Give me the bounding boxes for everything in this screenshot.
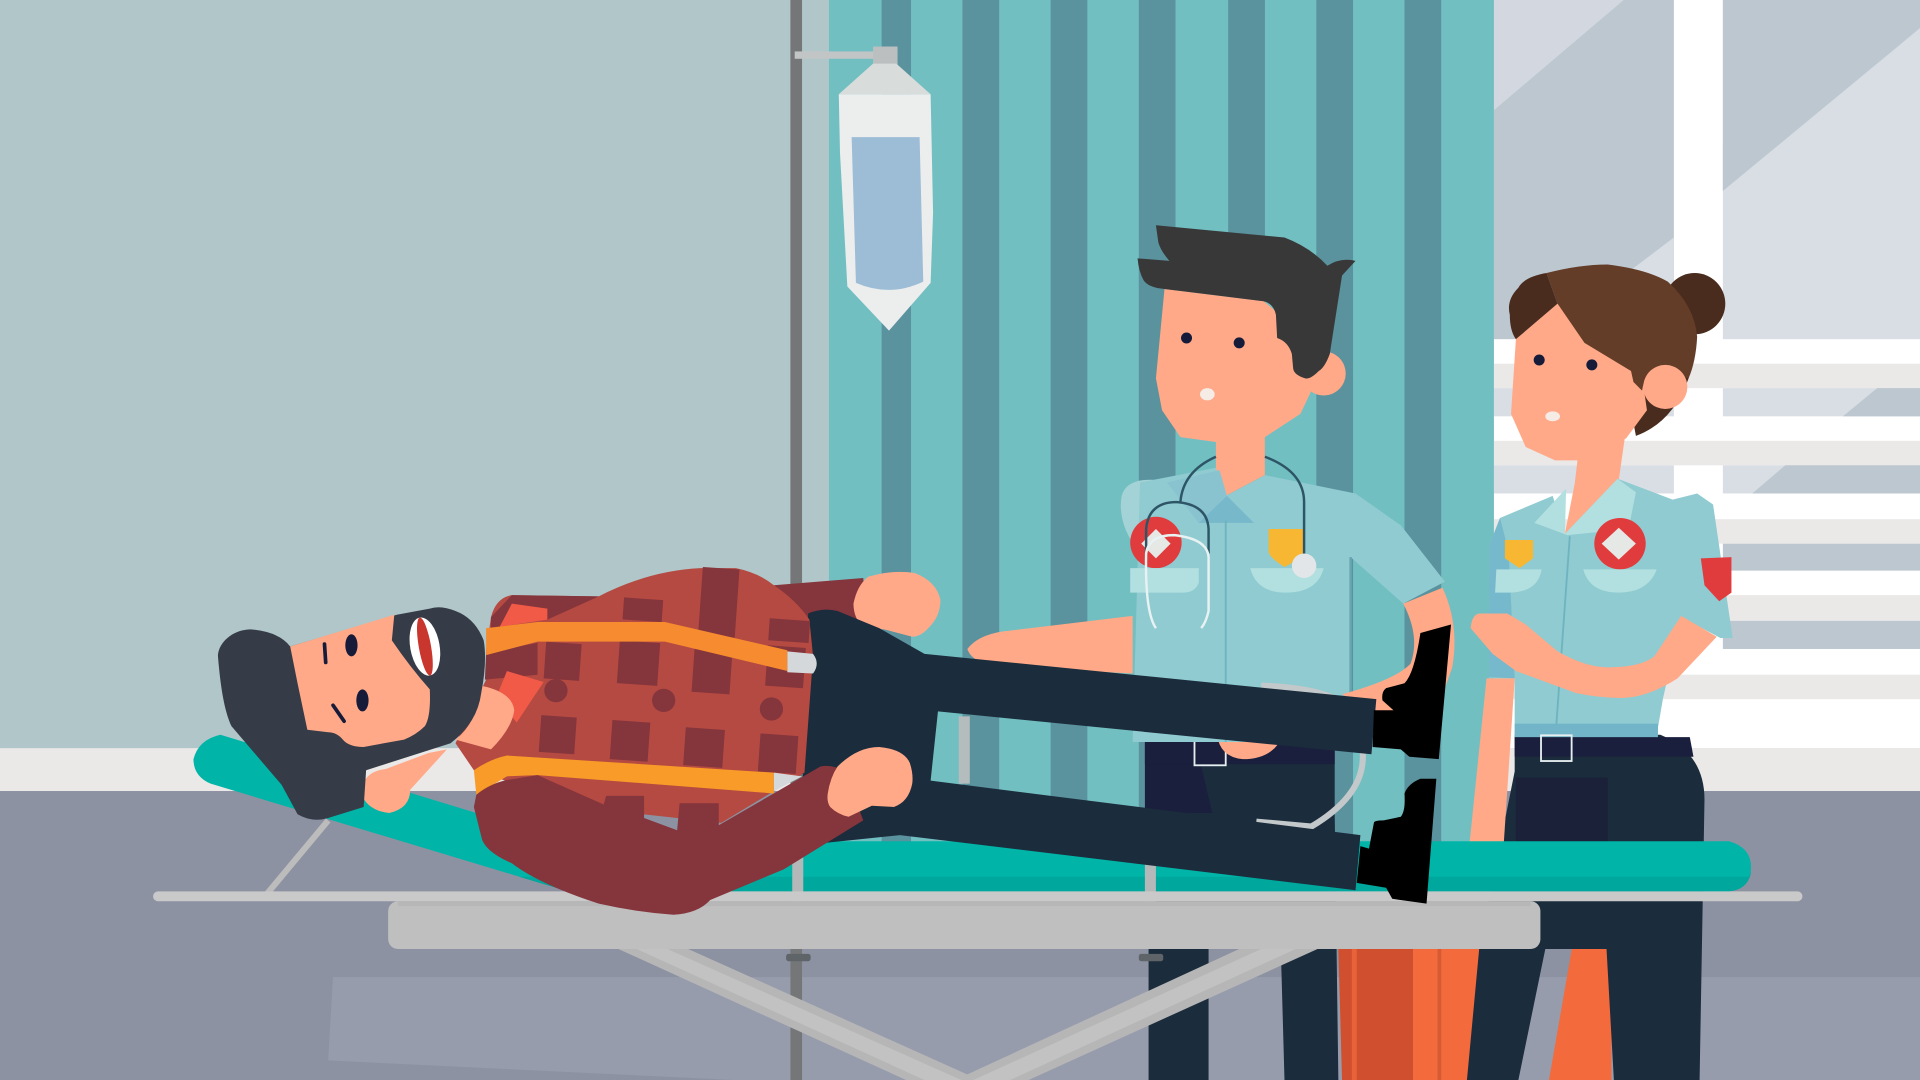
lower bar bbox=[388, 901, 1540, 949]
trousers bbox=[1145, 740, 1338, 1080]
near hand bbox=[827, 747, 913, 817]
hair and beard bbox=[218, 607, 485, 820]
paramedic: woman bbox=[1467, 264, 1733, 1080]
stethoscope bbox=[1146, 457, 1304, 628]
paramedic: man bbox=[967, 225, 1454, 1080]
belt buckle bbox=[1541, 735, 1572, 761]
far hand bbox=[853, 572, 940, 637]
neck bbox=[456, 686, 514, 749]
shirt bbox=[1133, 468, 1445, 742]
badge bbox=[1130, 517, 1182, 568]
far arm hand near head bbox=[361, 749, 447, 813]
IV pole bbox=[790, 0, 898, 1080]
hand at belt bbox=[1217, 735, 1283, 759]
boots bbox=[1373, 624, 1451, 759]
shirt corner shade bbox=[491, 595, 599, 628]
hair bbox=[1547, 264, 1697, 391]
arm right bbox=[1342, 588, 1454, 722]
ear bbox=[1643, 365, 1687, 409]
forearm left bbox=[967, 616, 1133, 673]
belt buckle bbox=[1194, 739, 1226, 765]
near sleeve bbox=[474, 766, 863, 915]
collar bbox=[1534, 479, 1636, 535]
shoulder bbox=[1121, 480, 1176, 553]
hair back and bun bbox=[1664, 273, 1725, 334]
eyes and mouth bbox=[1181, 332, 1192, 343]
far sleeve bbox=[774, 578, 867, 631]
upper suspender bbox=[486, 622, 787, 671]
badges and pockets bbox=[1594, 518, 1646, 569]
face bbox=[290, 615, 430, 747]
shirt checks bbox=[539, 567, 810, 774]
strut bbox=[267, 820, 328, 894]
neck bbox=[1216, 435, 1265, 496]
orange bags under stretcher bbox=[1338, 918, 1611, 1080]
stethoscope tube curve bbox=[1256, 686, 1363, 827]
belly arm bbox=[1471, 613, 1717, 698]
mattress bbox=[193, 735, 1751, 891]
patient bbox=[218, 567, 1451, 915]
shirt bbox=[1489, 479, 1733, 735]
window with blinds bbox=[1494, 0, 1920, 748]
curtain bbox=[829, 0, 1494, 842]
neck bbox=[1565, 429, 1626, 534]
pockets bbox=[1130, 568, 1199, 593]
eyes and brows bbox=[345, 634, 358, 656]
rail bbox=[153, 891, 1802, 901]
ear bbox=[1302, 351, 1346, 396]
head bbox=[1156, 289, 1329, 442]
mouth bbox=[405, 615, 444, 678]
knobs bbox=[786, 954, 811, 961]
trousers bbox=[1467, 735, 1704, 1080]
lower suspender bbox=[474, 756, 774, 795]
shirt body bbox=[456, 568, 813, 823]
stretcher bbox=[153, 716, 1802, 1080]
trousers and legs bbox=[802, 610, 1376, 890]
eyes and mouth bbox=[1534, 354, 1545, 366]
IV bag bbox=[839, 64, 933, 331]
head bbox=[1511, 304, 1647, 460]
hair bbox=[1138, 225, 1356, 379]
posts bbox=[792, 833, 803, 904]
hanging arm bbox=[1469, 678, 1515, 845]
X legs bbox=[618, 949, 980, 1080]
